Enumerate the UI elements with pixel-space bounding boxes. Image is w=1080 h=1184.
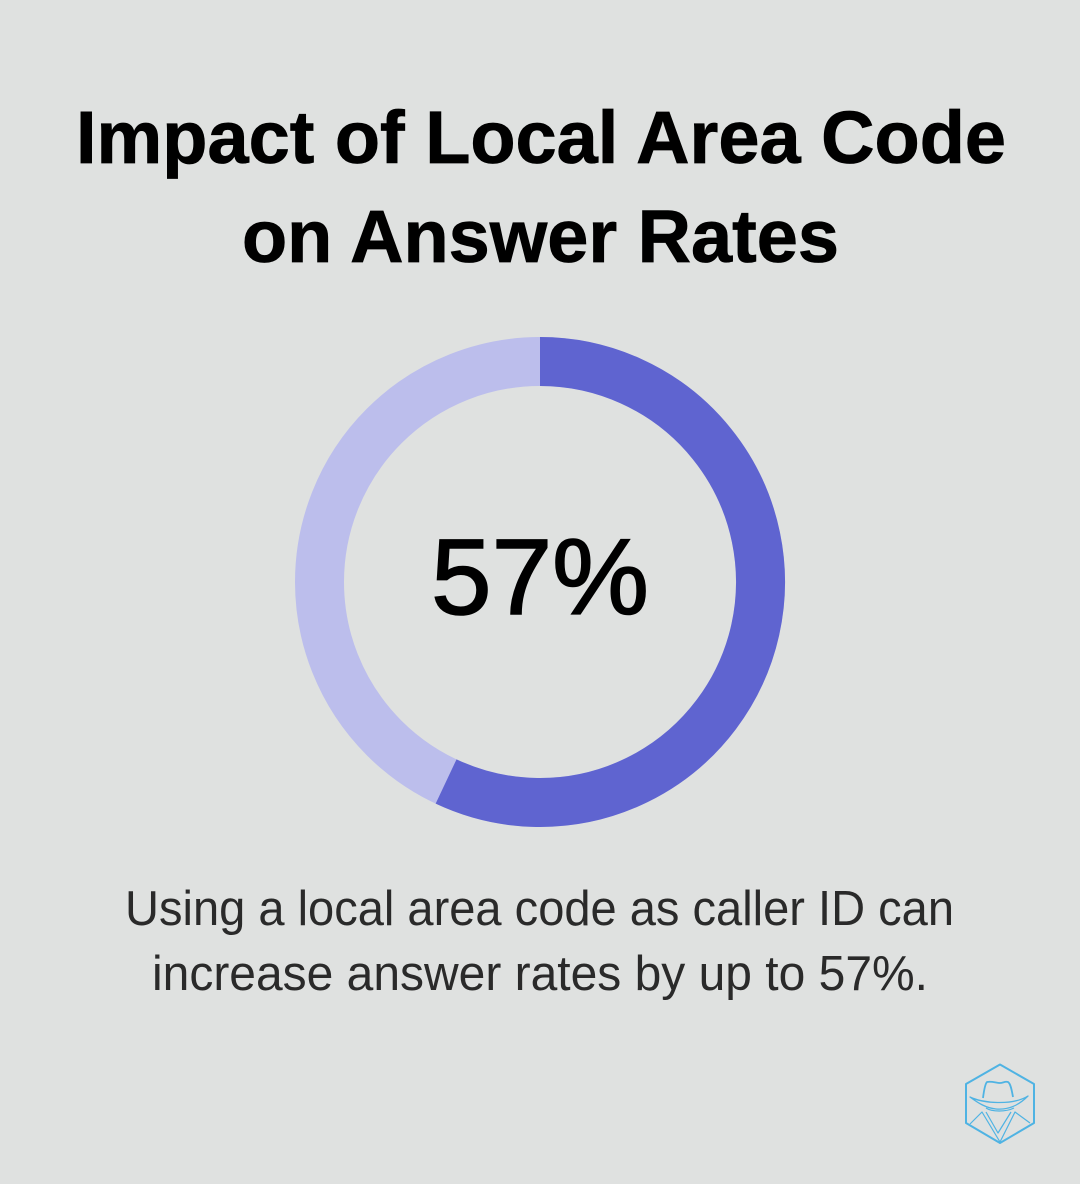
title: Impact of Local Area Code xyxy=(76,96,1006,179)
description text: Using a local area code as caller ID can xyxy=(125,882,954,936)
description text: increase answer rates by up to 57%. xyxy=(152,947,928,1001)
center value: 57% xyxy=(431,516,649,637)
donut chart: 57% xyxy=(320,362,761,803)
hat brim xyxy=(970,1096,1028,1109)
title: on Answer Rates xyxy=(242,195,839,278)
description text xyxy=(125,882,954,1001)
donut value arc xyxy=(446,362,761,803)
donut track xyxy=(320,362,760,802)
collar xyxy=(970,1108,1030,1142)
hat crown xyxy=(983,1082,1013,1098)
hexagon outline xyxy=(966,1064,1034,1143)
title xyxy=(76,96,1006,278)
icon: logo, spy in a hexagon xyxy=(966,1064,1034,1143)
